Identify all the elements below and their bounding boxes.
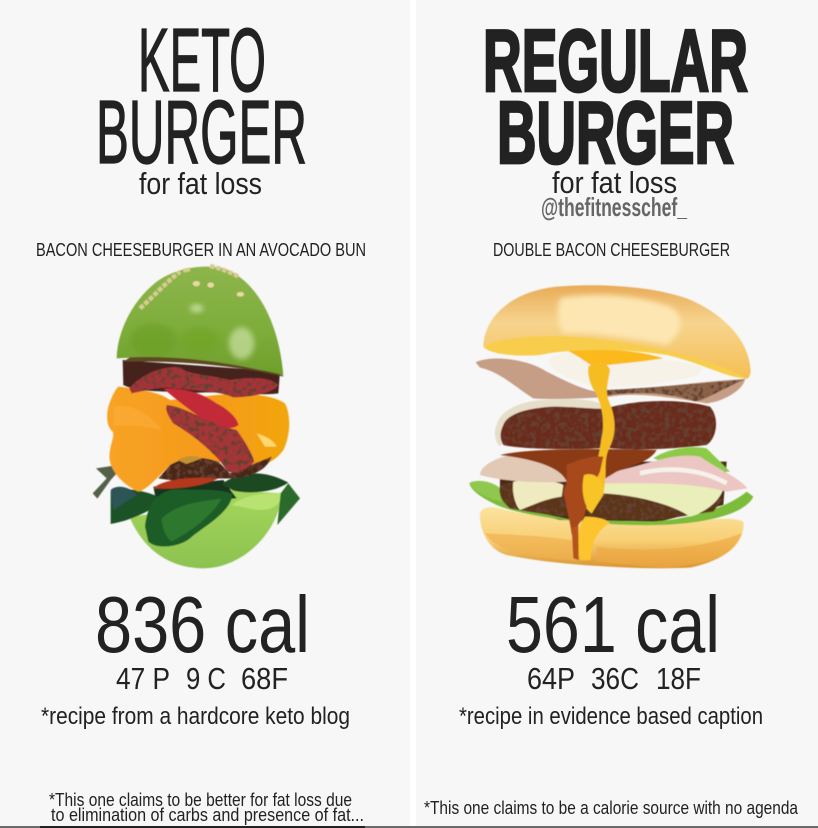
note: recipe source: *recipe in evidence based caption	[459, 703, 763, 730]
burger name: BACON CHEESEBURGER IN AN AVOCADO BUN	[36, 239, 366, 260]
heading: keto burger: BURGER	[96, 83, 307, 183]
footnote	[49, 789, 364, 825]
macros: 64P	[527, 661, 575, 696]
macros	[116, 661, 288, 696]
macros: 9 C	[186, 661, 226, 696]
macros	[527, 661, 701, 696]
macros: 36C	[591, 661, 639, 696]
illustration: bacon cheeseburger in avocado bun	[93, 266, 300, 568]
heading: keto burger	[96, 11, 307, 183]
footnote: to elimination of carbs and presence of fat...	[51, 804, 364, 825]
illustration: double bacon cheeseburger	[469, 285, 753, 568]
burger name: DOUBLE BACON CHEESEBURGER	[493, 239, 730, 260]
note: recipe source: *recipe from a hardcore keto blog	[41, 703, 350, 730]
subheading: for fat loss: for fat loss	[552, 165, 677, 200]
subheading: for fat loss: for fat loss	[139, 166, 262, 201]
calories: 561 cal: 561 cal	[506, 580, 720, 669]
macros: 68F	[241, 661, 288, 696]
footnote: *This one claims to be better for fat loss due	[49, 789, 352, 810]
macros: 47 P	[116, 661, 170, 696]
heading: regular burger	[483, 11, 748, 182]
panel: regular burger	[424, 28, 798, 818]
macros: 18F	[656, 661, 701, 696]
calories: 836 cal: 836 cal	[95, 580, 310, 669]
panel: keto burger	[37, 28, 365, 825]
heading: keto burger: KETO	[138, 11, 266, 111]
credit handle: @thefitnesschef_	[541, 192, 687, 222]
